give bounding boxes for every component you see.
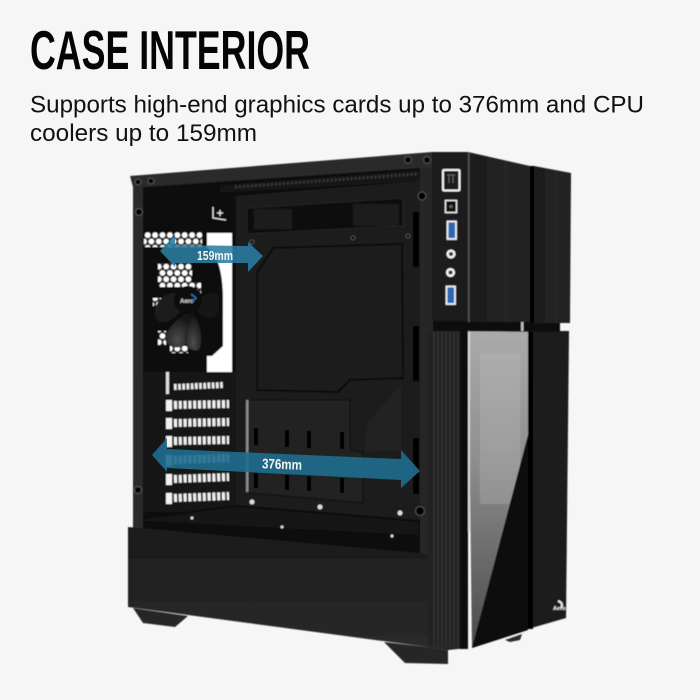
rear window opening: [207, 233, 232, 375]
right lower side panel: [528, 331, 569, 629]
PSU mark icon: [213, 207, 226, 220]
USB port top: [448, 222, 456, 239]
right foot: [384, 642, 448, 664]
left foot: [133, 608, 188, 627]
motherboard cut-out: [257, 244, 403, 392]
top tray cut-outs: [247, 198, 403, 234]
top bar: [130, 152, 432, 187]
power button: [443, 170, 460, 190]
case floor: [143, 500, 420, 552]
audio jack headphone: [448, 251, 454, 257]
right frame: [420, 168, 433, 558]
description text: [30, 92, 644, 147]
lower-right logo: Aero: [553, 606, 566, 612]
description text: Supports high-end graphics cards up to 376mm and CPU: [30, 92, 644, 118]
audio jack microphone: [447, 269, 454, 276]
lower tray plate with standoff slots: [249, 384, 401, 503]
top side panel: [534, 166, 571, 323]
tray side slots: [413, 212, 419, 494]
glass front panel: [468, 331, 528, 648]
USB port bottom: [446, 286, 455, 304]
cooling fan: [144, 232, 223, 356]
fan hub logo: Aero: [180, 299, 194, 305]
arrow: 376mm graphics card clearance: [152, 438, 420, 488]
top front panel: [468, 152, 530, 322]
divider band with notch: [433, 321, 560, 332]
title: CASE INTERIOR: [30, 19, 310, 81]
case interior back: [133, 155, 432, 555]
lower-right logo: [553, 601, 566, 612]
I/O panel: [432, 152, 468, 321]
front ridged column: [428, 330, 468, 650]
corner screws: [134, 156, 430, 516]
arrow: 159mm CPU cooler clearance: [160, 235, 263, 272]
PCI expansion slots: [144, 372, 236, 512]
PC case illustration: [128, 152, 571, 664]
arrow: 159mm CPU cooler clearance: 159mm: [197, 248, 233, 263]
arrow: 376mm graphics card clearance: 376mm: [262, 455, 302, 473]
motherboard tray: [236, 181, 420, 520]
plinth: [128, 527, 428, 647]
left frame: [133, 187, 143, 530]
description text: coolers up to 159mm: [30, 120, 257, 147]
reset button: [446, 200, 456, 212]
